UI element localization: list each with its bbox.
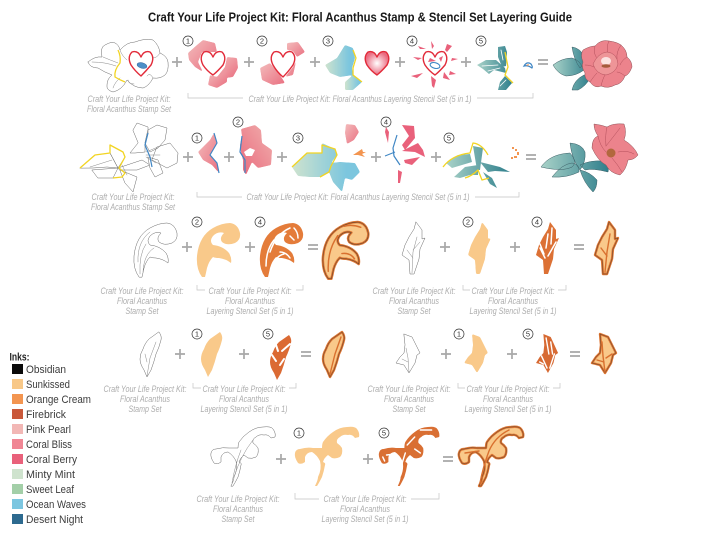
result: coloured feather bbox=[323, 332, 344, 377]
stencil 1: pink petals with heart bbox=[188, 40, 238, 88]
stencil: firebrick feather streaks bbox=[270, 335, 291, 380]
legend swatches and names bbox=[12, 364, 91, 526]
captions: Craft Your Life Project Kit: bbox=[324, 494, 407, 504]
stencil: peach leaf bbox=[464, 334, 488, 373]
stencil: orange leaf streaks bbox=[536, 222, 559, 274]
captions: Floral Acanthus bbox=[340, 504, 390, 514]
brackets for stencil captions bbox=[188, 93, 566, 499]
step number badges: 4 bbox=[410, 37, 414, 46]
step number badges: 3 bbox=[296, 134, 300, 143]
stencil 2: coral petals bbox=[240, 125, 272, 175]
step number badges: 1 bbox=[195, 134, 199, 143]
result: finished lily bbox=[541, 124, 638, 192]
legend swatches and names: Coral Bliss bbox=[26, 439, 72, 451]
stamp: lily outline bbox=[80, 123, 178, 192]
operators: plus and equals signs bbox=[172, 57, 584, 464]
step number badges: 4 bbox=[258, 218, 262, 227]
step number badges: 2 bbox=[195, 218, 199, 227]
stamp: peony outline bbox=[88, 39, 168, 92]
legend swatches and names: Coral Berry bbox=[26, 454, 77, 466]
step number badges: 5 bbox=[382, 429, 386, 438]
legend swatches and names: Orange Cream bbox=[26, 394, 91, 406]
stencil 4: coral streaks bbox=[385, 125, 425, 183]
legend swatches and names: Minty Mint bbox=[26, 469, 75, 481]
result: coloured leaf bbox=[595, 222, 618, 274]
stencil 2: pink petals with heart bbox=[260, 42, 305, 85]
stencil: orange scroll streaks bbox=[260, 223, 303, 277]
captions: Layering Stencil Set (5 in 1) bbox=[206, 306, 294, 316]
captions: Stamp Set bbox=[392, 404, 426, 414]
captions: Stamp Set bbox=[128, 404, 162, 414]
step number badges: 5 bbox=[266, 330, 270, 339]
captions: Stamp Set bbox=[222, 514, 255, 524]
stamp: wide scroll outline bbox=[211, 427, 275, 486]
captions: Craft Your Life Project Kit: bbox=[208, 286, 292, 296]
captions: Floral Acanthus bbox=[219, 394, 269, 404]
captions: Floral Acanthus bbox=[213, 504, 263, 514]
captions: Craft Your Life Project Kit: bbox=[104, 384, 187, 394]
step number badges: 2 bbox=[260, 37, 264, 46]
stamp: feather outline bbox=[140, 332, 161, 377]
captions: Floral Acanthus bbox=[384, 394, 434, 404]
stencil 1: pink petal bbox=[198, 133, 219, 173]
captions: Floral Acanthus bbox=[225, 296, 275, 306]
stencil 4: coral streaks bbox=[411, 41, 458, 88]
step number badges: 1 bbox=[297, 429, 301, 438]
step number badges: 4 bbox=[535, 218, 539, 227]
legend swatches and names: Ocean Waves bbox=[26, 499, 86, 511]
captions: Floral Acanthus bbox=[389, 296, 439, 306]
stencil: peach leaf bbox=[468, 222, 491, 274]
step number badges: 2 bbox=[466, 218, 470, 227]
stamp: scroll outline bbox=[134, 223, 177, 277]
stencil: peach wide scroll bbox=[295, 427, 359, 486]
captions: Craft Your Life Project Kit: bbox=[472, 286, 555, 296]
captions: Floral Acanthus bbox=[117, 296, 167, 306]
stencil 3: mint and ocean leaves bbox=[292, 124, 366, 192]
legend heading: Inks: bbox=[10, 352, 30, 364]
legend: inks bbox=[10, 352, 91, 526]
captions: Craft Your Life Project Kit: Floral Acanthus Layering Stencil Set (5 in 1) bbox=[246, 192, 470, 202]
captions: Floral Acanthus bbox=[488, 296, 538, 306]
stencil 3: teal leaves and gradient heart bbox=[325, 45, 389, 90]
captions: Layering Stencil Set (5 in 1) bbox=[200, 404, 288, 414]
result: coloured leaf bbox=[592, 334, 616, 373]
captions: Craft Your Life Project Kit: bbox=[372, 286, 456, 296]
result: coloured wide scroll bbox=[459, 427, 523, 486]
step number badges: 1 bbox=[186, 37, 190, 46]
legend swatches and names: Firebrick bbox=[26, 409, 66, 421]
captions bbox=[87, 94, 556, 524]
stamp: leaf outline bbox=[402, 222, 425, 274]
legend swatches and names: Obsidian bbox=[26, 364, 66, 376]
step number badges bbox=[183, 36, 542, 438]
stencil: peach feather bbox=[201, 332, 222, 377]
captions: Layering Stencil Set (5 in 1) bbox=[464, 404, 552, 414]
captions: Craft Your Life Project Kit: bbox=[100, 286, 184, 296]
captions: Stamp Set bbox=[398, 306, 431, 316]
legend swatches and names: Sunkissed bbox=[26, 379, 70, 391]
step number badges: 1 bbox=[457, 330, 461, 339]
legend swatches and names: Desert Night bbox=[26, 514, 83, 526]
legend swatches and names: Sweet Leaf bbox=[26, 484, 75, 496]
step number badges: 5 bbox=[479, 37, 483, 46]
step number badges: 4 bbox=[384, 118, 388, 127]
captions: Craft Your Life Project Kit: bbox=[202, 384, 286, 394]
row 2: lily layering bbox=[80, 123, 638, 192]
legend swatches and names: Pink Pearl bbox=[26, 424, 71, 436]
row 4 left: feather bbox=[140, 332, 344, 380]
stencil: firebrick leaf streaks bbox=[536, 334, 558, 373]
step number badges: 3 bbox=[326, 37, 330, 46]
captions: Craft Your Life Project Kit: bbox=[466, 384, 550, 394]
step number badges: 5 bbox=[526, 330, 530, 339]
captions: Craft Your Life Project Kit: Floral Acanthus Layering Stencil Set (5 in 1) bbox=[248, 94, 472, 104]
row 5: wide scroll bbox=[211, 427, 523, 486]
result: coloured scroll bbox=[323, 222, 368, 279]
stencil: orange wide scroll streaks bbox=[379, 427, 439, 486]
captions: Craft Your Life Project Kit: bbox=[368, 384, 451, 394]
step number badges: 1 bbox=[195, 330, 199, 339]
captions: Floral Acanthus Stamp Set bbox=[91, 202, 175, 212]
stencil: peach scroll bbox=[197, 223, 240, 277]
stamp: leaf outline bbox=[396, 334, 420, 373]
row 3 left: large scroll bbox=[134, 222, 368, 279]
row 1: peony layering bbox=[88, 39, 632, 92]
captions: Craft Your Life Project Kit: bbox=[196, 494, 280, 504]
title: Craft Your Life Project Kit: Floral Acanthus Stamp & Stencil Set Layering Guide bbox=[148, 10, 572, 24]
row 3 right: tall leaf bbox=[402, 222, 618, 274]
step number badges: 2 bbox=[236, 118, 240, 127]
stencil 5: dark teal leaves bbox=[477, 46, 532, 90]
captions: Floral Acanthus bbox=[120, 394, 170, 404]
captions: Craft Your Life Project Kit: bbox=[92, 192, 175, 202]
stencil 5: teal leaves bbox=[443, 143, 519, 188]
result: finished peony bbox=[553, 41, 632, 90]
step number badges: 5 bbox=[447, 134, 451, 143]
captions: Layering Stencil Set (5 in 1) bbox=[322, 514, 408, 524]
captions: Floral Acanthus bbox=[483, 394, 533, 404]
captions: Stamp Set bbox=[126, 306, 159, 316]
captions: Floral Acanthus Stamp Set bbox=[87, 104, 171, 114]
row 4 right: serrated leaf bbox=[396, 334, 616, 373]
captions: Layering Stencil Set (5 in 1) bbox=[470, 306, 556, 316]
captions: Craft Your Life Project Kit: bbox=[88, 94, 171, 104]
